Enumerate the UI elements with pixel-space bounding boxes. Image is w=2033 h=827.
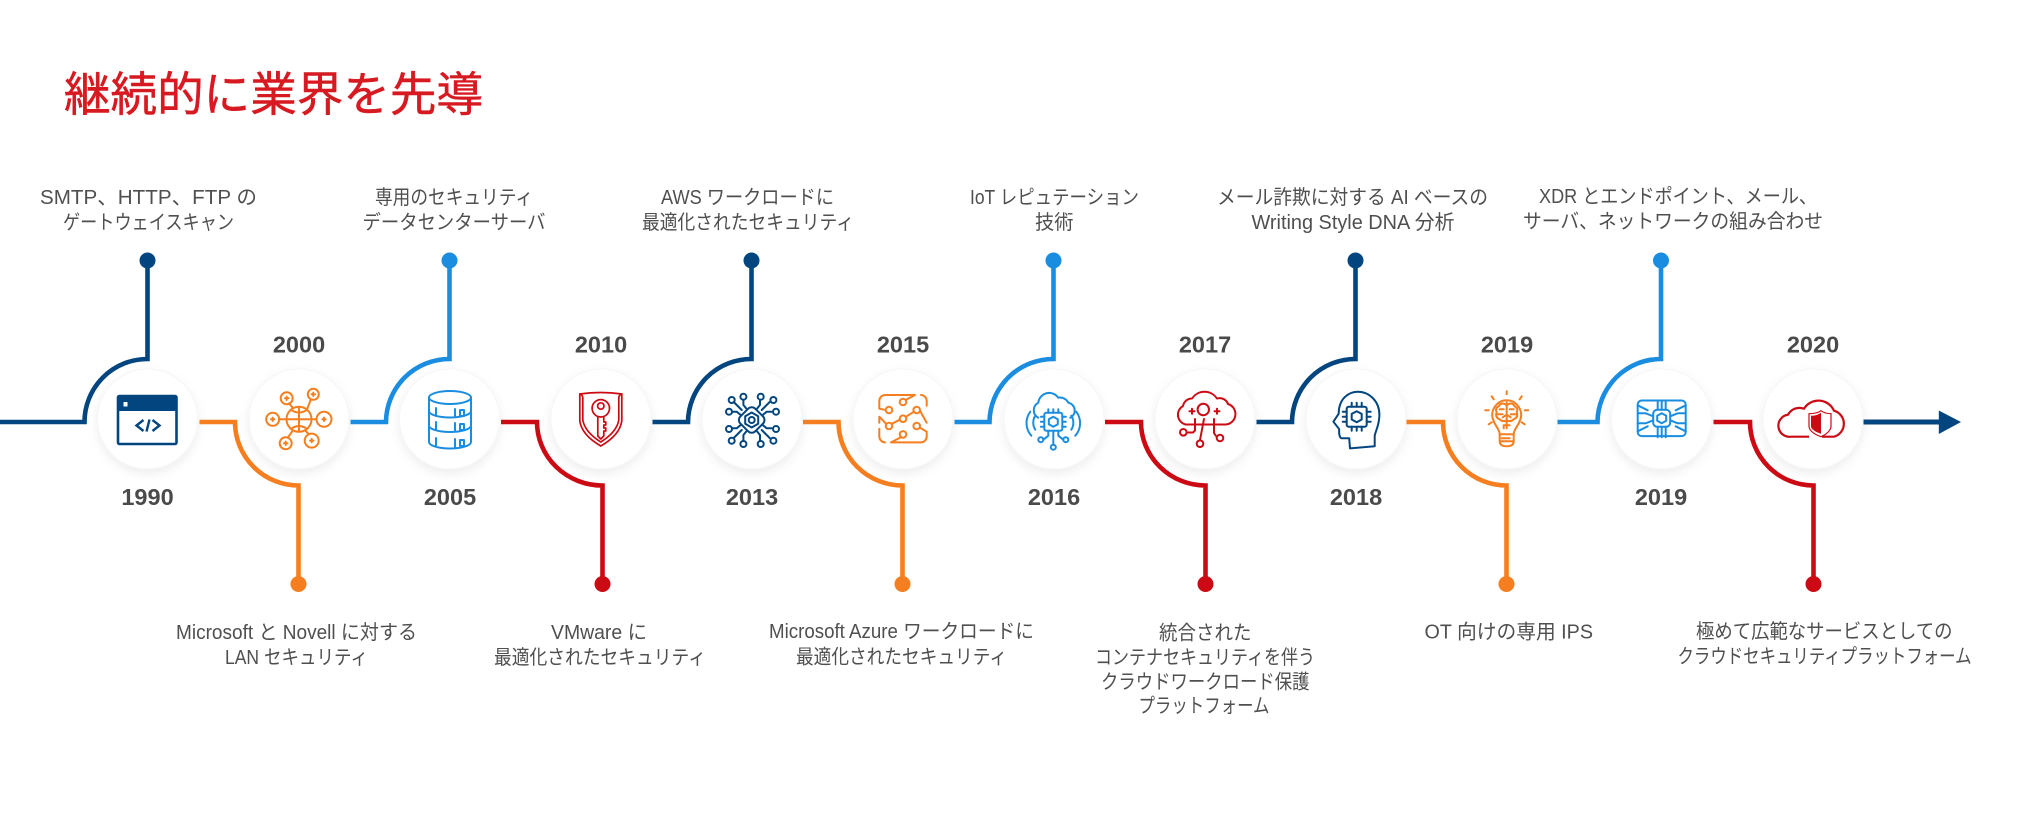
milestone: 2015 — [769, 332, 1034, 668]
description: クラウドワークロード保護 — [1101, 670, 1310, 694]
year: 2013 — [726, 484, 778, 510]
icon: cloud shield — [1778, 401, 1844, 437]
description: 最適化されたセキュリティ — [494, 646, 706, 669]
milestone: 2017 — [1095, 332, 1315, 718]
milestone: 2016 — [954, 187, 1139, 510]
connector: blue up — [1558, 260, 1661, 422]
year: 1990 — [121, 484, 174, 510]
description: 統合された — [1159, 622, 1252, 644]
description: サーバ、ネットワークの組み合わせ — [1523, 210, 1823, 233]
connector: blue up — [350, 260, 450, 422]
dot — [1498, 576, 1514, 592]
milestone: 2013 — [642, 186, 854, 510]
connector: red down — [1714, 422, 1814, 584]
year: 2020 — [1787, 332, 1839, 358]
icon disc — [551, 369, 651, 469]
description: コンテナセキュリティを伴う — [1095, 646, 1315, 669]
description: クラウドセキュリティプラットフォーム — [1678, 645, 1972, 668]
description: Microsoft Azure ワークロードに — [769, 620, 1034, 643]
connector: red down — [501, 422, 602, 584]
year: 2016 — [1028, 484, 1080, 510]
dot — [744, 252, 760, 268]
description — [362, 186, 546, 234]
icon: circuit chip — [726, 394, 779, 447]
description — [970, 187, 1139, 234]
icon disc — [1004, 369, 1104, 469]
description: 専用のセキュリティ — [375, 186, 533, 209]
icon disc — [1306, 369, 1406, 469]
title: 継続的に業界を先導 — [64, 68, 483, 121]
description — [1095, 622, 1315, 718]
icon: globe network — [266, 389, 332, 449]
description — [176, 621, 417, 669]
dot — [1653, 252, 1669, 268]
year: 2005 — [424, 484, 476, 510]
icon disc — [98, 369, 198, 469]
dot — [1046, 252, 1062, 268]
description — [1678, 620, 1972, 668]
year: 2017 — [1179, 332, 1231, 358]
milestone: 2020 — [1678, 332, 1972, 668]
milestone: 2005 — [350, 186, 546, 510]
icon: cloud network — [1178, 392, 1235, 447]
year: 2018 — [1330, 484, 1382, 510]
description: SMTP、HTTP、FTP の — [40, 187, 257, 209]
connector: blue up — [954, 260, 1054, 422]
connector: orange down — [200, 422, 298, 584]
connector: navy up — [1256, 260, 1356, 422]
icon: head chip — [1333, 392, 1379, 448]
connector: navy up — [652, 260, 752, 422]
arrow — [1864, 410, 1961, 434]
description: データセンターサーバ — [362, 211, 546, 234]
dot — [894, 576, 910, 592]
dot — [1198, 576, 1214, 592]
description: IoT レピュテーション — [970, 187, 1139, 209]
icon: code window — [118, 396, 176, 444]
description: プラットフォーム — [1138, 696, 1270, 718]
year: 2010 — [575, 332, 627, 358]
description: 最適化されたセキュリティ — [642, 211, 854, 234]
description: VMware に — [551, 622, 647, 644]
connector: red down — [1105, 422, 1206, 584]
description — [642, 186, 854, 234]
milestone: 2000 — [176, 332, 417, 669]
icon: chip card — [1638, 400, 1686, 437]
description: 極めて広範なサービスとしての — [1696, 620, 1952, 643]
icon: shield key — [580, 392, 622, 446]
icon disc — [249, 369, 349, 469]
icon disc — [1155, 369, 1255, 469]
dot — [594, 576, 610, 592]
description: 技術 — [1035, 211, 1074, 234]
icon disc — [853, 369, 953, 469]
icon: brain bulb — [1485, 391, 1528, 446]
dot — [1348, 252, 1364, 268]
dot — [290, 576, 306, 592]
description: ゲートウェイスキャン — [63, 211, 234, 234]
description: Writing Style DNA 分析 — [1252, 211, 1454, 234]
milestone: 2010 — [494, 332, 706, 669]
description: メール詐欺に対する AI ベースの — [1217, 186, 1488, 209]
dot — [1806, 576, 1822, 592]
milestone: 2019 (bulb) — [1406, 332, 1593, 644]
icon: database — [429, 391, 471, 448]
description: Microsoft と Novell に対する — [176, 621, 417, 644]
icon disc — [1457, 369, 1557, 469]
year: 2000 — [273, 332, 325, 358]
year: 2019 — [1635, 484, 1687, 510]
icon: circuit board — [879, 395, 927, 442]
description: AWS ワークロードに — [661, 186, 834, 209]
year: 2019 — [1481, 332, 1533, 358]
year: 2015 — [877, 332, 929, 358]
description — [1217, 186, 1488, 234]
dot — [140, 252, 156, 268]
connector: orange down — [803, 422, 902, 584]
description — [769, 620, 1034, 668]
milestone: 2018 — [1217, 186, 1488, 510]
description — [40, 187, 257, 234]
milestone: 1990 — [0, 187, 257, 510]
icon disc — [1763, 369, 1863, 469]
connector: orange down — [1406, 422, 1506, 584]
icon disc — [702, 369, 802, 469]
icon: cloud chip — [1027, 393, 1080, 450]
description — [1523, 185, 1823, 233]
connector: navy up — [0, 260, 148, 422]
icon disc — [1612, 369, 1712, 469]
description: LAN セキュリティ — [225, 647, 368, 669]
description: OT 向けの専用 IPS — [1424, 620, 1593, 644]
icon disc — [400, 369, 500, 469]
description — [494, 622, 706, 669]
dot — [442, 252, 458, 268]
milestone: 2019 (chip) — [1523, 185, 1823, 510]
description: 最適化されたセキュリティ — [796, 646, 1007, 668]
description: XDR とエンドポイント、メール、 — [1539, 185, 1817, 208]
